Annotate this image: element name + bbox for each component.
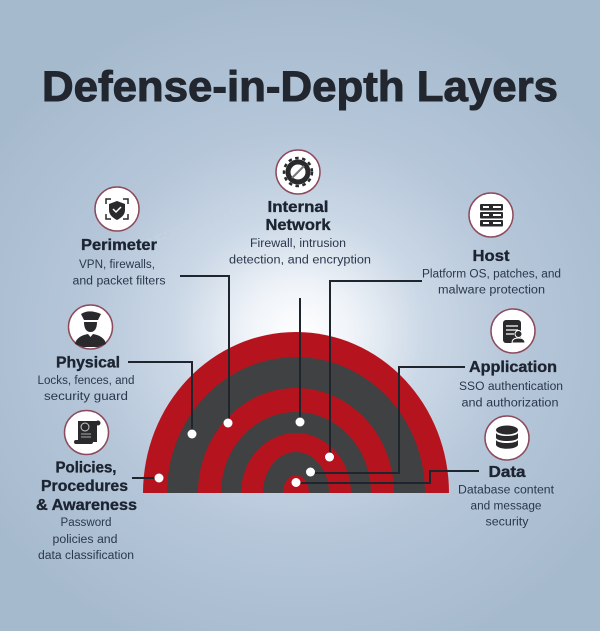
heading: Internal Network: Network [266,217,331,234]
text: physical description [38,375,134,403]
text: data description: security [486,516,529,528]
text: perimeter description: VPN, firewalls, [79,259,155,271]
heading: Policies, Procedures & Awareness: Procedures [41,478,128,495]
panel: perimeter [72,187,166,288]
panel: physical [38,305,134,403]
heading: Application: Application [469,359,557,376]
heading: Policies, Procedures & Awareness: Policies, [56,460,116,476]
chart: concentric semicircle layers [143,332,449,493]
connector dots [154,418,334,487]
text: host description: Platform OS, patches, and [422,268,561,280]
connector lines [128,276,479,483]
heading: Data: Data [488,464,526,481]
text: policies description: policies and [52,534,118,546]
panel: application [459,309,563,410]
text: application description: and authorization [462,398,558,410]
text: perimeter description: and packet filters [72,276,166,288]
text: host description: malware protection [438,284,545,296]
panel: host [422,193,561,296]
text: physical description: security guard [44,391,128,403]
title: Defense-in-Depth Layers [42,63,558,111]
panel: data [458,416,555,528]
icon: gear [276,150,320,194]
text: policies description: data classification [38,550,134,562]
heading: Internal Network: Internal [268,199,328,216]
icon: guard [68,305,112,349]
heading: Policies, Procedures & Awareness [36,460,137,514]
heading: Perimeter: Perimeter [81,237,157,254]
panel: internal network [229,150,371,266]
text: internal network description: Firewall, intrusion [250,238,346,250]
text: policies description: Password [60,517,112,529]
panel: policies [36,410,137,562]
icon: shield [95,187,139,231]
text: application description [459,381,563,410]
text: host description [422,268,561,296]
text: data description [458,484,555,528]
heading: Physical: Physical [56,354,120,372]
heading: Internal Network [266,199,331,234]
icon: scroll [64,410,108,454]
watermark: INFOSECTRAIN [143,203,233,252]
text: application description: SSO authentication [459,381,563,393]
text: policies description [38,517,134,562]
text: physical description: Locks, fences, and [38,375,134,387]
icon: document user [491,309,535,353]
heading: Policies, Procedures & Awareness: & Awareness [36,497,137,514]
text: internal network description: detection, and encryption [229,254,371,266]
text: perimeter description [72,259,166,288]
icon: database [485,416,529,460]
text: data description: and message [470,500,542,512]
heading: Host: Host [472,248,510,265]
icon: server [469,193,513,237]
text: internal network description [229,238,371,266]
text: data description: Database content [458,484,555,496]
